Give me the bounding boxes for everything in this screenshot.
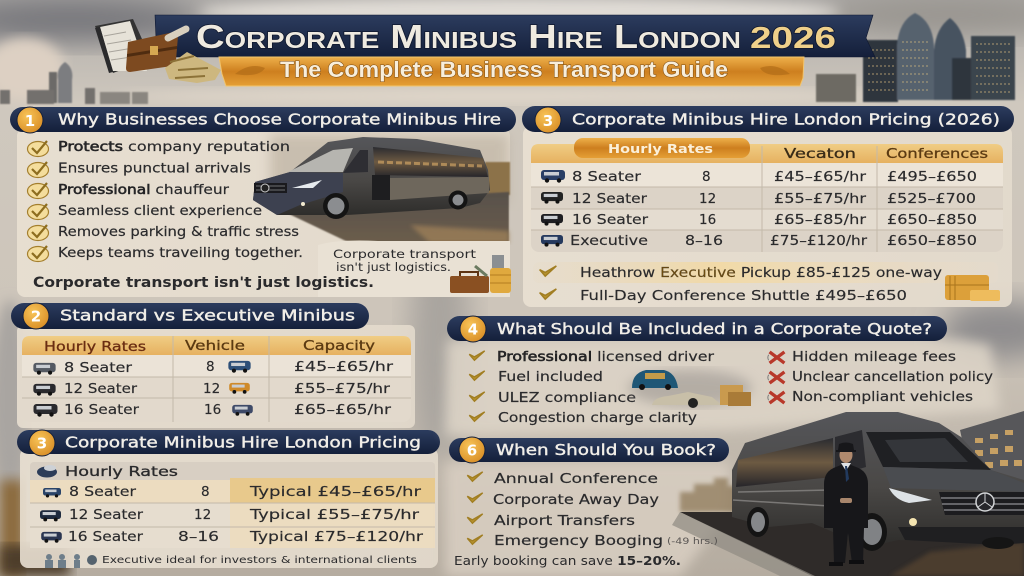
item: ULEZ compliance — [498, 391, 636, 406]
tab: hourly rates: Hourly Rates — [608, 141, 713, 156]
item — [28, 140, 290, 156]
badge 2: 2 — [31, 308, 41, 326]
takeaway: Corporate transport isn't just logistics. — [33, 275, 374, 291]
row 12 seater: £55–£75/hr — [294, 381, 391, 397]
badge 3 — [535, 107, 561, 133]
row 8 seater — [541, 169, 977, 185]
badge 4: 4 — [468, 320, 478, 338]
item: Seamless client experience — [58, 204, 262, 219]
ribbon navy — [155, 15, 875, 57]
row 12 seater: 12 — [699, 191, 716, 207]
row 16 seater — [34, 402, 392, 418]
row executive: £75–£120/hr — [770, 233, 868, 249]
heading: Standard vs Executive Minibus — [60, 306, 355, 324]
comparison table — [22, 336, 411, 422]
skyline left — [0, 62, 148, 104]
item — [467, 534, 663, 549]
large minibus — [732, 412, 1024, 551]
item — [467, 472, 658, 487]
row 16 seater: 16 Seater — [572, 212, 649, 228]
skyline right — [816, 13, 1015, 102]
panel 4: corporate quote — [469, 350, 993, 426]
item: Unclear cancellation policy — [792, 370, 993, 385]
row 8 seater: Typical £45–£65/hr — [249, 484, 422, 500]
row 8 seater: 8 Seater — [69, 484, 137, 500]
photo: minibus on road — [253, 134, 510, 243]
section 4 backdrop — [445, 340, 1000, 576]
chauffeur — [824, 442, 868, 566]
item — [469, 370, 603, 385]
row 8 seater: 8 Seater — [64, 360, 133, 376]
header 2 — [11, 303, 369, 329]
col header: Capacity — [303, 338, 375, 354]
col header: Vecaton — [784, 146, 856, 162]
badge 4 — [460, 316, 486, 342]
row 8 seater: £45–£65/hr — [294, 359, 394, 375]
extras — [533, 262, 1000, 304]
row 16 seater: £65–£85/hr — [774, 212, 867, 228]
title banner — [95, 15, 875, 86]
row executive — [541, 233, 977, 249]
item: Airport Transfers — [494, 514, 635, 529]
row 12 seater — [33, 381, 391, 397]
row 12 seater: 12 — [194, 507, 211, 523]
row 8 seater: £45–£65/hr — [774, 169, 867, 185]
item: Professional chauffeur — [58, 183, 230, 198]
heading: Corporate Minibus Hire London Pricing — [65, 434, 421, 452]
callout — [318, 240, 510, 297]
section 6: when to book — [454, 472, 718, 568]
row 12 seater: 12 Seater — [64, 381, 137, 397]
check — [540, 266, 556, 276]
note: (-49 hrs.) — [667, 537, 718, 547]
badge 2 — [23, 303, 49, 329]
ribbon orange — [219, 57, 804, 86]
heathrow text: Heathrow Executive Pickup £85-£125 one-way — [580, 265, 942, 281]
item — [469, 391, 636, 406]
row 12 seater: £525–£700 — [887, 191, 976, 207]
item: Fuel included — [498, 370, 603, 385]
item: Ensures punctual arrivals — [58, 162, 251, 176]
check — [540, 289, 556, 299]
item: Annual Conference — [494, 472, 658, 487]
icon: gold suitcases — [945, 275, 1000, 301]
row 12 seater: £55–£75/hr — [774, 191, 867, 207]
item — [467, 493, 659, 508]
city and road scene — [672, 411, 1024, 576]
row 8 seater: 8 Seater — [572, 169, 642, 185]
rear wheel — [747, 507, 769, 537]
checklist — [28, 140, 303, 262]
header 6 — [449, 437, 729, 463]
header 1 — [10, 107, 516, 133]
row 16 seater: 16 Seater — [64, 402, 139, 418]
panel 1: why businesses choose — [17, 128, 511, 297]
header 4 — [447, 316, 947, 342]
row 16 seater: 16 — [699, 212, 716, 228]
icon: coins — [37, 465, 57, 478]
pricing table — [531, 138, 1003, 252]
badge 3: 3 — [543, 112, 553, 130]
row 12 seater: Typical £55–£75/hr — [249, 507, 420, 523]
panel background — [20, 448, 438, 568]
title text: Corporate Minibus Hire London — [196, 18, 741, 55]
row 8 seater — [43, 484, 422, 500]
icon: briefcase and luggage — [450, 255, 511, 293]
heading: When Should You Book? — [496, 441, 716, 459]
item: Removes parking & traffic stress — [58, 225, 299, 240]
row 16 seater: Typical £75–£120/hr — [249, 529, 424, 545]
badge 3: 3 — [37, 434, 47, 452]
row 12 seater: 12 Seater — [69, 507, 143, 523]
col header: Vehicle — [185, 338, 245, 354]
row executive: 8–16 — [685, 233, 723, 249]
sub heading: Hourly Rates — [65, 464, 178, 480]
front wheel — [857, 513, 887, 551]
item: Hidden mileage fees — [792, 350, 956, 365]
illustration: cars and boxes — [628, 370, 752, 408]
rates table — [30, 462, 435, 548]
shuttle text: Full-Day Conference Shuttle £495–£650 — [580, 288, 907, 304]
row 16 seater: £650–£850 — [887, 212, 977, 228]
row 8 seater: £495–£650 — [887, 169, 977, 185]
badge 1 — [17, 107, 43, 133]
heading: What Should Be Included in a Corporate Quote? — [497, 320, 932, 338]
heading: Why Businesses Choose Corporate Minibus Hire — [58, 110, 501, 128]
row 16 seater — [41, 529, 424, 545]
row 12 seater: 12 — [203, 381, 220, 397]
footnote: Executive ideal for investors & international clients — [102, 555, 417, 566]
item: Non-compliant vehicles — [792, 390, 973, 405]
panel 3: pricing — [20, 448, 438, 568]
early booking: Early booking can save 15–20%. — [454, 553, 681, 568]
panel 3: pricing 2026 — [523, 126, 1012, 307]
grille — [939, 492, 1024, 515]
icon: people — [45, 554, 97, 568]
heading: Corporate Minibus Hire London Pricing (2026) — [572, 110, 1000, 128]
item: Professional licensed driver — [497, 350, 715, 365]
title year: 2026 — [750, 20, 836, 55]
panel 2: standard vs executive — [17, 325, 415, 428]
badge 3 — [29, 430, 55, 456]
col header: Hourly Rates — [44, 339, 146, 355]
subtitle: The Complete Business Transport Guide — [280, 57, 728, 82]
row executive: Executive — [570, 233, 648, 249]
row 8 seater — [33, 359, 394, 376]
col header: Conferences — [886, 146, 988, 162]
included list — [469, 350, 715, 426]
row 12 seater — [541, 191, 976, 207]
row 16 seater: 16 Seater — [68, 529, 143, 545]
callout: isn't just logistics. — [336, 260, 451, 274]
row 12 seater: 12 Seater — [572, 191, 647, 207]
row 8 seater: 8 — [206, 359, 215, 375]
icon: clipboard and briefcase — [95, 19, 221, 83]
panel background — [523, 126, 1012, 307]
building — [960, 411, 1024, 500]
row 8 seater: 8 — [201, 484, 210, 500]
row 16 seater: 16 — [204, 402, 221, 418]
row 16 seater — [541, 212, 977, 228]
item — [467, 514, 635, 529]
row 12 seater — [40, 507, 420, 523]
item: Corporate Away Day — [493, 493, 659, 508]
panel background — [17, 128, 510, 297]
item: Keeps teams traveiling together. — [58, 246, 303, 261]
tab: hourly rates — [574, 138, 750, 158]
item — [28, 162, 251, 178]
headlight — [889, 488, 932, 503]
row executive: £650–£850 — [887, 233, 977, 249]
header 3 pricing — [17, 430, 440, 456]
booking list — [467, 472, 663, 549]
row 8 seater: 8 — [702, 169, 711, 185]
excluded list — [768, 350, 993, 405]
callout: Corporate transport — [333, 247, 477, 261]
row 16 seater: 8–16 — [178, 529, 219, 545]
item: Congestion charge clarity — [498, 411, 697, 426]
header 3 pricing 2026 — [522, 106, 1014, 133]
item: Protects company reputation — [58, 140, 290, 155]
badge 1: 1 — [25, 112, 35, 130]
panel background — [17, 325, 415, 428]
badge 6 — [459, 437, 485, 463]
badge 6: 6 — [467, 442, 477, 460]
row 16 seater: £65–£65/hr — [294, 402, 392, 418]
item: Emergency Booging — [494, 534, 663, 549]
